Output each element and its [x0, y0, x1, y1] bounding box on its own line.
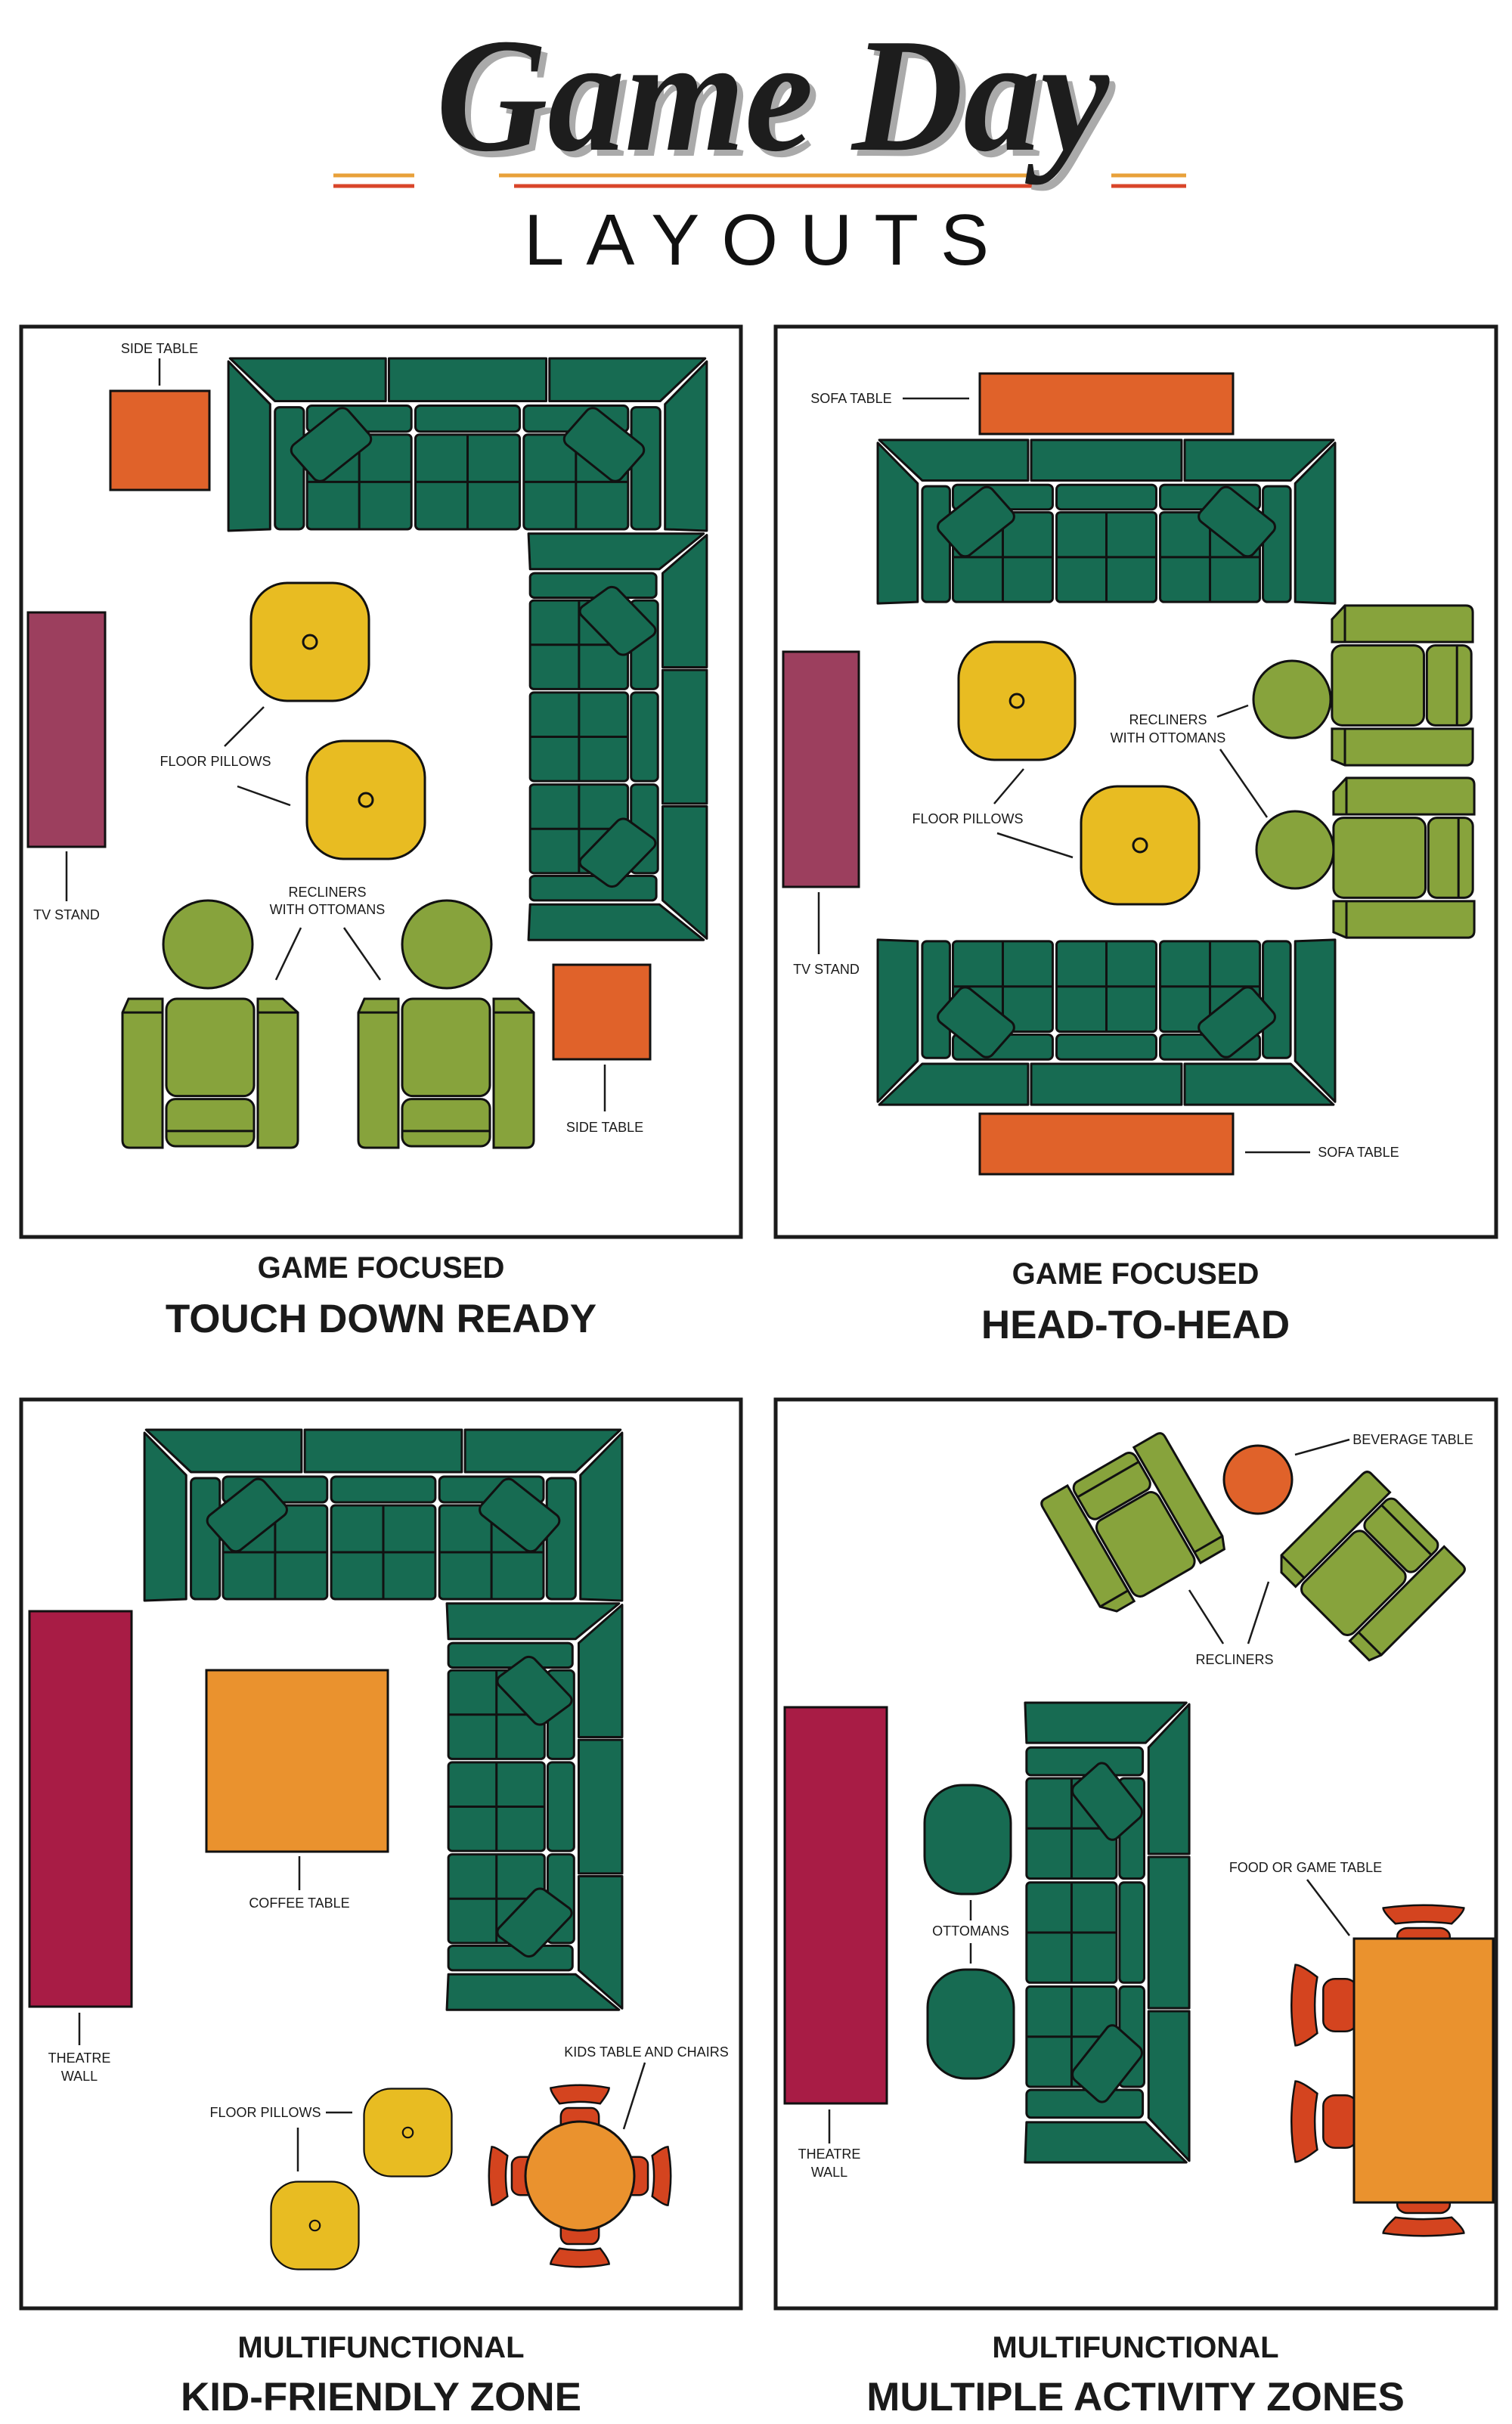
sofa table top	[980, 374, 1233, 434]
caption: kid-friendly zone: MULTIFUNCTIONAL	[237, 2331, 525, 2364]
floor pillows	[251, 583, 425, 859]
label: theatre wall: WALL	[61, 2069, 98, 2084]
label: recliners: RECLINERS	[288, 885, 367, 900]
caption: head-to-head	[981, 1257, 1290, 1347]
floor pillows	[271, 2088, 452, 2270]
caption: head-to-head: HEAD-TO-HEAD	[981, 1303, 1290, 1347]
label: sofa table: SOFA TABLE	[810, 391, 892, 406]
label: TV stand	[793, 892, 860, 977]
label: beverage table: BEVERAGE TABLE	[1352, 1432, 1473, 1447]
label: theatre wall: THEATRE	[798, 2147, 860, 2162]
label: TV stand: TV STAND	[33, 907, 100, 922]
L sofa	[228, 358, 707, 940]
label: TV stand: TV STAND	[793, 962, 860, 977]
label: beverage table	[1295, 1432, 1473, 1455]
label: ottomans	[932, 1900, 1009, 1964]
theatre wall	[785, 1707, 887, 2103]
label: sofa table 2: SOFA TABLE	[1318, 1145, 1399, 1160]
label: floor pillows: FLOOR PILLOWS	[912, 811, 1024, 826]
caption: multiple activity zones	[866, 2331, 1405, 2419]
panel: head-to-head	[776, 327, 1496, 1237]
beverage table	[1224, 1446, 1292, 1514]
label: recliners: RECLINERS	[1195, 1652, 1274, 1667]
label: food or game table: FOOD OR GAME TABLE	[1229, 1860, 1382, 1875]
food or game table with chairs	[1291, 1905, 1493, 2236]
panel: multiple activity zones	[776, 1400, 1496, 2308]
label: recliners	[1111, 705, 1267, 817]
label: coffee table: COFFEE TABLE	[249, 1895, 350, 1911]
label: floor pillows	[160, 707, 290, 805]
sofas	[878, 440, 1335, 1105]
caption: multiple activity zones: MULTIFUNCTIONAL	[992, 2331, 1279, 2364]
kids table and chairs	[489, 2085, 671, 2267]
title: Game Day: Game Day	[436, 5, 1110, 185]
panel: touch down ready	[21, 327, 741, 1237]
label: coffee table	[249, 1856, 350, 1911]
panel: kid-friendly zone	[21, 1400, 741, 2308]
label: floor pillows	[912, 769, 1073, 857]
floor pillows	[959, 642, 1199, 904]
label: side table: SIDE TABLE	[121, 341, 198, 356]
sofa	[1025, 1703, 1189, 2162]
label: theatre wall: THEATRE	[48, 2050, 110, 2066]
label: theatre wall: WALL	[811, 2165, 847, 2180]
title: Game Day: Game Day	[442, 11, 1116, 191]
caption: head-to-head: GAME FOCUSED	[1012, 1257, 1259, 1291]
label: food or game table	[1229, 1860, 1382, 1936]
label: recliners: RECLINERS	[1129, 712, 1207, 727]
label: kids table: KIDS TABLE AND CHAIRS	[564, 2044, 729, 2060]
label: side table	[121, 341, 198, 386]
theatre wall	[29, 1611, 132, 2007]
label: floor pillows: FLOOR PILLOWS	[160, 754, 271, 769]
caption: touch down ready: TOUCH DOWN READY	[166, 1297, 596, 1341]
recliners with ottomans	[1253, 606, 1474, 938]
recliners with ottomans	[122, 900, 534, 1148]
label: recliners	[270, 885, 385, 980]
ottomans	[925, 1785, 1014, 2078]
TV stand	[783, 652, 859, 887]
label: kids table	[564, 2044, 729, 2129]
caption: touch down ready: GAME FOCUSED	[258, 1251, 504, 1285]
caption: kid-friendly zone: KID-FRIENDLY ZONE	[181, 2375, 581, 2419]
label: ottomans: OTTOMANS	[932, 1923, 1009, 1939]
label: TV stand	[33, 851, 100, 922]
L sofa	[144, 1430, 622, 2010]
caption: kid-friendly zone	[181, 2331, 581, 2419]
TV stand	[28, 612, 105, 847]
subtitle: LAYOUTS: LAYOUTS	[524, 200, 989, 281]
label: side table 2	[566, 1065, 643, 1135]
label: theatre wall	[48, 2013, 110, 2084]
recliners	[1040, 1431, 1467, 1663]
label: theatre wall	[798, 2109, 860, 2180]
label: recliners: WITH OTTOMANS	[1111, 730, 1225, 745]
label: side table 2: SIDE TABLE	[566, 1120, 643, 1135]
label: recliners	[1189, 1582, 1274, 1667]
side table top	[110, 391, 209, 490]
label: recliners: WITH OTTOMANS	[270, 902, 385, 917]
side table bottom	[553, 965, 650, 1059]
label: floor pillows: FLOOR PILLOWS	[209, 2105, 321, 2120]
sofa table bottom	[980, 1114, 1233, 1174]
caption: touch down ready	[166, 1251, 596, 1341]
coffee table	[206, 1670, 388, 1852]
caption: multiple activity zones: MULTIPLE ACTIVITY ZONES	[866, 2375, 1405, 2419]
